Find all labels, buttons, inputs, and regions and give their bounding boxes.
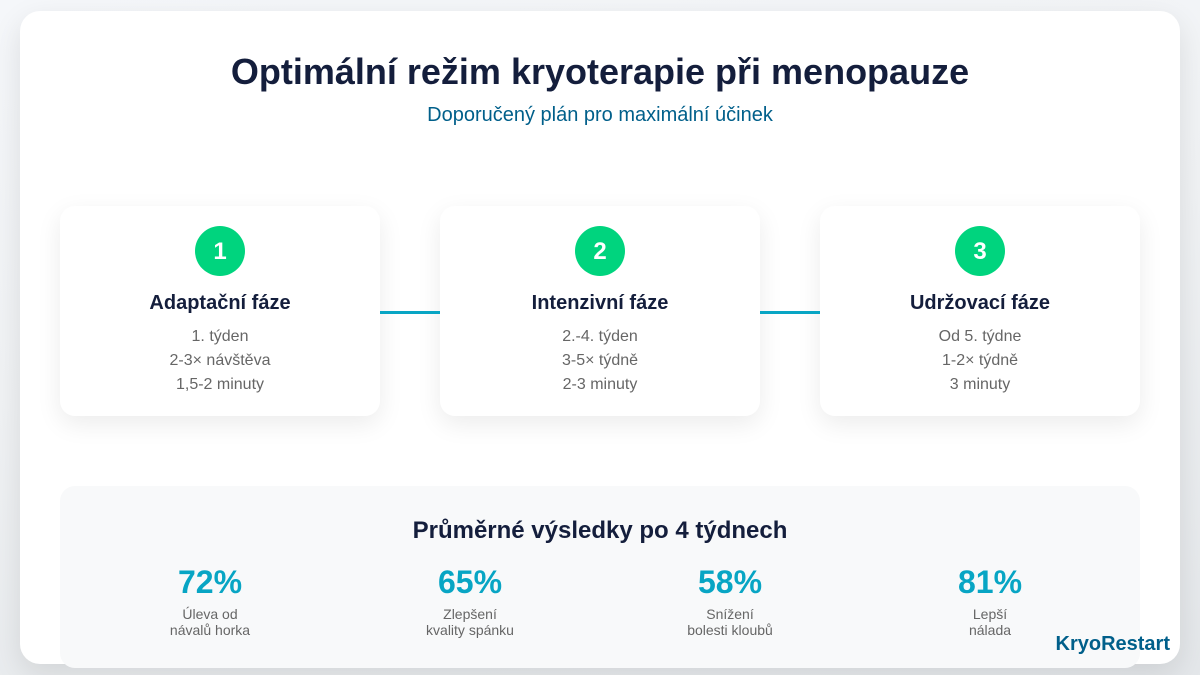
label [969, 606, 1012, 638]
stat: sleep [426, 564, 514, 638]
phase 3 details: 1-2× týdně [942, 352, 1018, 369]
phase 3 heading: Udržovací fáze [910, 292, 1050, 314]
label: Úleva od [182, 606, 238, 622]
step number 2 [575, 226, 625, 276]
phase 2 details: 3-5× týdně [562, 352, 638, 369]
value 72%: 72% [178, 564, 242, 600]
label: nálada [969, 622, 1011, 638]
label: Lepší [973, 606, 1007, 622]
phase 2 details: 2.-4. týden [562, 328, 638, 345]
label: Snížení [706, 606, 754, 622]
results heading: Průměrné výsledky po 4 týdnech [413, 517, 787, 544]
step number 1: 1 [213, 238, 227, 265]
value 58%: 58% [698, 564, 762, 600]
stat: mood [958, 564, 1022, 638]
title: Optimální režim kryoterapie při menopauze [231, 51, 969, 92]
phase 3 details: Od 5. týdne [939, 328, 1021, 345]
label [170, 606, 250, 638]
label: Zlepšení [443, 606, 497, 622]
brand logo: KryoRestart [1056, 633, 1170, 655]
label [426, 606, 514, 638]
phase 1 details [170, 328, 270, 393]
stat: joint pain [687, 564, 773, 638]
phase 1 details: 1,5-2 minuty [176, 376, 264, 393]
connector arrow: phase 1 to 2 [380, 311, 440, 314]
connector arrow: phase 2 to 3 [760, 311, 820, 314]
phase 2 details [562, 328, 638, 393]
value 81%: 81% [958, 564, 1022, 600]
subtitle: Doporučený plán pro maximální účinek [427, 104, 773, 126]
phase 2 heading: Intenzivní fáze [532, 292, 668, 314]
phase 1 heading: Adaptační fáze [149, 292, 291, 314]
label: kvality spánku [426, 622, 514, 638]
phase 2 details: 2-3 minuty [563, 376, 637, 393]
phase 3 details: 3 minuty [950, 376, 1010, 393]
step number 2: 2 [593, 238, 607, 265]
stat: hot flushes [170, 564, 250, 638]
value 65%: 65% [438, 564, 502, 600]
label: bolesti kloubů [687, 622, 773, 638]
phase 1 details: 1. týden [192, 328, 248, 345]
panel: phase 1 [60, 206, 380, 416]
step number 3 [955, 226, 1005, 276]
label: návalů horka [170, 622, 250, 638]
panel: results [60, 486, 1140, 668]
phase 3 details [939, 328, 1021, 393]
phase 1 details: 2-3× návštěva [170, 352, 270, 369]
step number 3: 3 [973, 238, 987, 265]
step number 1 [195, 226, 245, 276]
panel: phase 3 [820, 206, 1140, 416]
label [687, 606, 773, 638]
panel: phase 2 [440, 206, 760, 416]
